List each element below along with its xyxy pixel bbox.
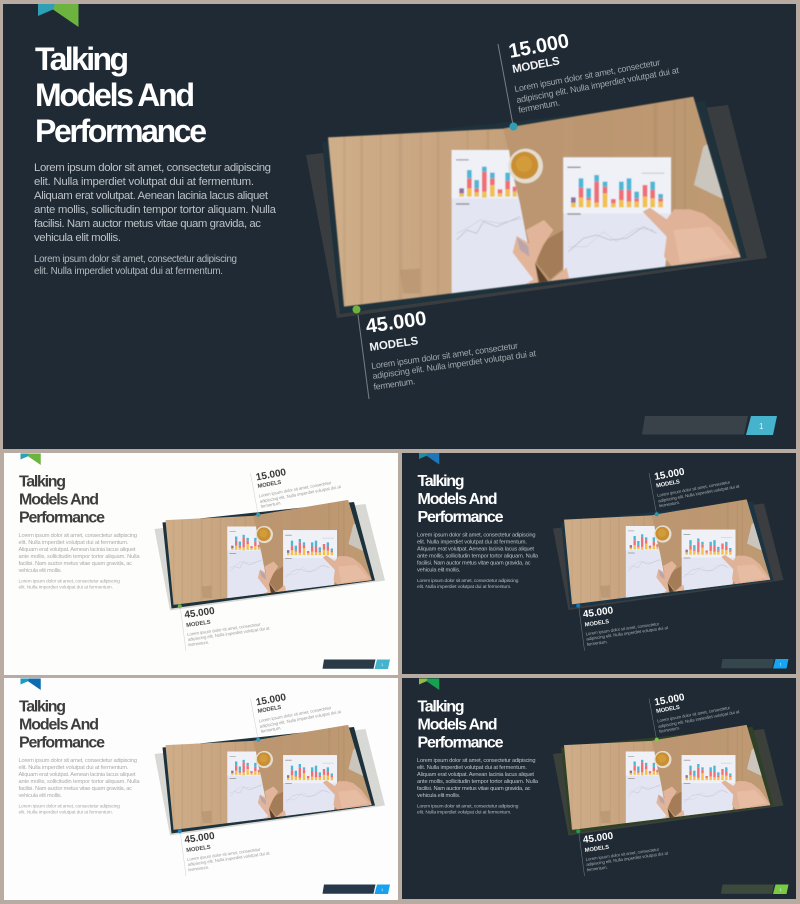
secondary text <box>34 254 237 277</box>
secondary text: Lorem ipsum dolor sit amet, consectetur adipiscing <box>34 254 237 265</box>
callout: 15.000 models: fermentum. <box>260 500 282 509</box>
callout: 15.000 models: 15.000 <box>507 30 571 63</box>
callout: 45.000 models: 45.000 <box>184 831 216 846</box>
body text: elit. Nulla imperdiet volutpat dui at fermentum. <box>18 540 129 546</box>
callout: 15.000 models: Lorem ipsum dolor sit amet, consectetur <box>258 480 332 498</box>
photo: hands on charts <box>162 721 378 833</box>
secondary text <box>417 578 519 590</box>
body text: vehicula elit mollis. <box>18 568 62 574</box>
icon: bookmark ribbon <box>20 678 41 690</box>
title: Talking <box>19 698 66 716</box>
callout: 45.000 models: 45.000 <box>364 308 428 338</box>
body text: vehicula elit mollis. <box>417 793 461 799</box>
secondary text: Lorem ipsum dolor sit amet, consectetur adipiscing <box>417 578 519 584</box>
callout: 15.000 models <box>649 683 741 739</box>
slide background <box>4 453 398 675</box>
photo: hands on charts <box>560 496 777 608</box>
title <box>418 698 504 752</box>
title: Models And <box>418 716 498 734</box>
body text <box>18 758 140 799</box>
callout: 15.000 models <box>250 458 343 514</box>
callout: 45.000 models: 45.000 <box>582 831 614 846</box>
photo shadow grey <box>553 504 784 610</box>
callout: 45.000 models: fermentum. <box>188 640 209 647</box>
callout dot: teal <box>655 512 659 516</box>
photo: hands on charts <box>320 90 753 313</box>
callout: 15.000 models: MODELS <box>257 705 282 715</box>
footer page tag: 1 <box>759 422 764 431</box>
photo shadow grey <box>154 729 385 836</box>
callout: 15.000 models: Lorem ipsum dolor sit amet, consectetur <box>514 57 661 94</box>
secondary text <box>18 804 120 816</box>
callout dot: green <box>178 604 182 608</box>
callout dot: green <box>352 306 360 314</box>
body text: vehicula elit mollis. <box>18 793 62 799</box>
callout: 15.000 models <box>498 11 682 125</box>
callout: 15.000 models: Lorem ipsum dolor sit amet, consectetur <box>657 705 731 723</box>
secondary text: elit. Nulla imperdiet volutpat dui at fermentum. <box>18 584 113 590</box>
callout: 45.000 models: MODELS <box>584 845 610 854</box>
callout dot: blue <box>576 604 580 608</box>
callout: 45.000 models: fermentum. <box>373 376 416 392</box>
secondary text: elit. Nulla imperdiet volutpat dui at fermentum. <box>18 810 113 816</box>
callout dot: blue <box>256 738 260 742</box>
callout: 45.000 models: adipiscing elit. Nulla imperdiet volutpat dui at <box>586 625 669 641</box>
secondary text <box>18 578 120 590</box>
callout: 45.000 models: Lorem ipsum dolor sit amet, consectetur <box>371 340 519 371</box>
body text: Lorem ipsum dolor sit amet, consectetur adipiscing <box>18 758 137 764</box>
body text: facilisi. Nam auctor metus vitae quam gravida, ac <box>417 786 531 792</box>
slide content <box>18 678 390 894</box>
callout: 45.000 models <box>579 824 670 876</box>
callout dot: dark blue <box>178 829 182 833</box>
callout: 45.000 models <box>180 599 271 651</box>
callout: 15.000 models: Lorem ipsum dolor sit amet, consectetur <box>657 479 731 498</box>
photo shadow band <box>322 101 747 314</box>
callout: 15.000 models: adipiscing elit. Nulla imperdiet volutpat dui at <box>658 709 741 729</box>
title <box>19 698 105 752</box>
callout: 15.000 models: adipiscing elit. Nulla imperdiet volutpat dui at <box>516 65 680 105</box>
icon: bookmark ribbon <box>419 678 439 690</box>
panel: main dark slide <box>3 4 796 449</box>
title: Talking <box>418 698 464 716</box>
body text: facilisi. Nam auctor metus vitae quam gravida, ac <box>34 218 261 230</box>
title: Models And <box>19 492 99 508</box>
body text: Aliquam erat volutpat. Aenean lacinia lacus aliquet <box>417 772 534 778</box>
callout: 15.000 models: 15.000 <box>255 692 287 708</box>
body text: Aliquam erat volutpat. Aenean lacinia lacus aliquet <box>18 772 136 778</box>
title: Performance <box>35 113 207 149</box>
panel: dark slide green <box>402 678 796 899</box>
body text: ante mollis, sollicitudin tempor tortor aliquam. Nulla <box>34 204 277 216</box>
panel: white slide blue <box>4 678 398 900</box>
callout dot: teal <box>256 513 260 517</box>
photo shadow band <box>162 502 375 608</box>
footer page tag: 1 <box>780 887 782 892</box>
body text: ante mollis, sollicitudin tempor tortor aliquam. Nulla <box>417 554 539 560</box>
callout: 45.000 models: MODELS <box>186 620 211 629</box>
slide background <box>3 4 796 449</box>
callout: 15.000 models: fermentum. <box>260 725 282 734</box>
body text: facilisi. Nam auctor metus vitae quam gravida, ac <box>18 786 132 792</box>
body text: elit. Nulla imperdiet volutpat dui at fermentum. <box>417 540 527 546</box>
slide content <box>417 678 788 894</box>
icon: bookmark ribbon <box>20 454 41 465</box>
title: Performance <box>418 509 504 526</box>
photo shadow band <box>162 727 375 834</box>
body text: Lorem ipsum dolor sit amet, consectetur adipiscing <box>417 758 536 764</box>
callout: 45.000 models: 45.000 <box>184 606 216 621</box>
photo shadow grey <box>553 729 784 836</box>
photo shadow band <box>561 502 774 608</box>
callout: 45.000 models: MODELS <box>369 335 419 354</box>
body text <box>417 758 539 799</box>
callout: 15.000 models <box>649 457 741 514</box>
callout: 15.000 models: 15.000 <box>654 466 686 483</box>
footer page tag: 1 <box>780 662 782 666</box>
callout: 15.000 models: MODELS <box>656 479 681 489</box>
photo: hands on charts <box>560 721 777 833</box>
photo shadow grey <box>154 504 385 610</box>
callout: 45.000 models: fermentum. <box>586 865 608 872</box>
footer page tag <box>322 884 390 894</box>
callout: 45.000 models: fermentum. <box>188 865 209 872</box>
body text <box>18 533 140 574</box>
callout dot: teal <box>510 122 518 130</box>
callout: 45.000 models <box>579 598 670 650</box>
callout: 45.000 models: MODELS <box>584 619 610 628</box>
body text: ante mollis, sollicitudin tempor tortor aliquam. Nulla <box>18 554 140 560</box>
callout: 15.000 models <box>250 683 343 739</box>
body text: ante mollis, sollicitudin tempor tortor aliquam. Nulla <box>18 779 140 785</box>
title <box>19 474 105 526</box>
callout: 45.000 models: fermentum. <box>586 639 608 647</box>
body text <box>417 532 539 574</box>
secondary text: Lorem ipsum dolor sit amet, consectetur adipiscing <box>417 804 519 810</box>
photo shadow band <box>561 727 774 834</box>
callout: 45.000 models: Lorem ipsum dolor sit amet, consectetur <box>585 847 660 862</box>
body text: facilisi. Nam auctor metus vitae quam gravida, ac <box>18 561 132 567</box>
title: Talking <box>35 41 129 77</box>
secondary text: elit. Nulla imperdiet volutpat dui at fermentum. <box>34 266 223 277</box>
slide content <box>417 453 788 668</box>
footer page tag <box>721 659 788 668</box>
footer page tag <box>322 660 390 669</box>
panel: white slide teal green <box>4 453 398 675</box>
body text: Aliquam erat volutpat. Aenean lacinia lacus aliquet <box>417 546 534 552</box>
body text: Aliquam erat volutpat. Aenean lacinia lacus aliquet <box>34 190 269 202</box>
callout: 45.000 models: 45.000 <box>582 605 614 620</box>
title: Talking <box>418 473 464 490</box>
callout: 45.000 models <box>358 293 539 399</box>
secondary text: elit. Nulla imperdiet volutpat dui at fermentum. <box>417 584 512 590</box>
callout dot: lime <box>655 738 659 742</box>
secondary text: elit. Nulla imperdiet volutpat dui at fermentum. <box>417 810 512 816</box>
secondary text: Lorem ipsum dolor sit amet, consectetur adipiscing <box>18 578 120 584</box>
callout: 45.000 models: Lorem ipsum dolor sit amet, consectetur <box>187 847 261 862</box>
callout: 45.000 models: Lorem ipsum dolor sit amet, consectetur <box>585 621 660 636</box>
callout: 45.000 models <box>180 824 271 876</box>
slide background <box>4 678 398 900</box>
slide background <box>402 453 796 674</box>
callout: 15.000 models: MODELS <box>257 480 282 490</box>
callout: 15.000 models: adipiscing elit. Nulla imperdiet volutpat dui at <box>259 709 342 729</box>
footer page tag: 1 <box>381 662 384 667</box>
callout: 15.000 models: fermentum. <box>659 725 680 734</box>
body text: vehicula elit mollis. <box>34 232 121 244</box>
callout: 15.000 models: Lorem ipsum dolor sit amet, consectetur <box>258 705 332 723</box>
title <box>35 41 207 149</box>
footer page tag <box>642 416 777 435</box>
callout: 45.000 models: adipiscing elit. Nulla imperdiet volutpat dui at <box>187 625 271 642</box>
footer page tag: 1 <box>381 887 384 892</box>
callout: 45.000 models: MODELS <box>186 845 211 854</box>
callout: 15.000 models: adipiscing elit. Nulla imperdiet volutpat dui at <box>658 483 741 503</box>
body text: elit. Nulla imperdiet volutpat dui at fermentum. <box>34 176 254 188</box>
photo: hands on charts <box>162 496 378 608</box>
callout: 15.000 models: MODELS <box>511 55 561 76</box>
title: Models And <box>418 491 498 508</box>
title: Performance <box>19 510 105 526</box>
callout: 15.000 models: adipiscing elit. Nulla imperdiet volutpat dui at <box>259 484 342 504</box>
body text <box>34 162 277 244</box>
body text: facilisi. Nam auctor metus vitae quam gravida, ac <box>417 560 531 566</box>
callout: 15.000 models: MODELS <box>656 705 681 715</box>
body text: Lorem ipsum dolor sit amet, consectetur adipiscing <box>18 533 137 539</box>
callout: 15.000 models: fermentum. <box>518 97 561 115</box>
title: Talking <box>19 474 66 490</box>
panel: dark slide blue <box>402 453 796 674</box>
callout: 15.000 models: 15.000 <box>255 467 287 483</box>
secondary text: Lorem ipsum dolor sit amet, consectetur adipiscing <box>18 804 120 810</box>
body text: Lorem ipsum dolor sit amet, consectetur adipiscing <box>417 532 536 538</box>
photo shadow grey <box>306 105 767 318</box>
body text: elit. Nulla imperdiet volutpat dui at fermentum. <box>417 765 527 771</box>
callout: 45.000 models: adipiscing elit. Nulla imperdiet volutpat dui at <box>372 348 537 381</box>
body text: Aliquam erat volutpat. Aenean lacinia lacus aliquet <box>18 547 136 553</box>
title <box>418 473 504 526</box>
callout: 45.000 models: Lorem ipsum dolor sit amet, consectetur <box>187 622 261 637</box>
slide content <box>18 454 390 669</box>
slide background <box>402 678 796 899</box>
title: Models And <box>19 716 99 734</box>
title: Performance <box>418 734 504 752</box>
callout: 15.000 models: fermentum. <box>659 500 680 508</box>
body text: vehicula elit mollis. <box>417 568 461 574</box>
secondary text <box>417 804 519 816</box>
title: Models And <box>35 77 195 113</box>
callout: 15.000 models: 15.000 <box>654 692 686 708</box>
title: Performance <box>19 734 105 752</box>
body text: Lorem ipsum dolor sit amet, consectetur adipiscing <box>34 162 271 174</box>
body text: elit. Nulla imperdiet volutpat dui at fermentum. <box>18 765 129 771</box>
footer page tag <box>721 884 788 894</box>
body text: ante mollis, sollicitudin tempor tortor aliquam. Nulla <box>417 779 539 785</box>
icon: bookmark ribbon <box>419 453 439 464</box>
callout dot: green <box>576 829 580 833</box>
callout: 45.000 models: adipiscing elit. Nulla imperdiet volutpat dui at <box>586 850 669 867</box>
callout: 45.000 models: adipiscing elit. Nulla imperdiet volutpat dui at <box>187 850 271 867</box>
icon: bookmark ribbon <box>38 4 78 27</box>
